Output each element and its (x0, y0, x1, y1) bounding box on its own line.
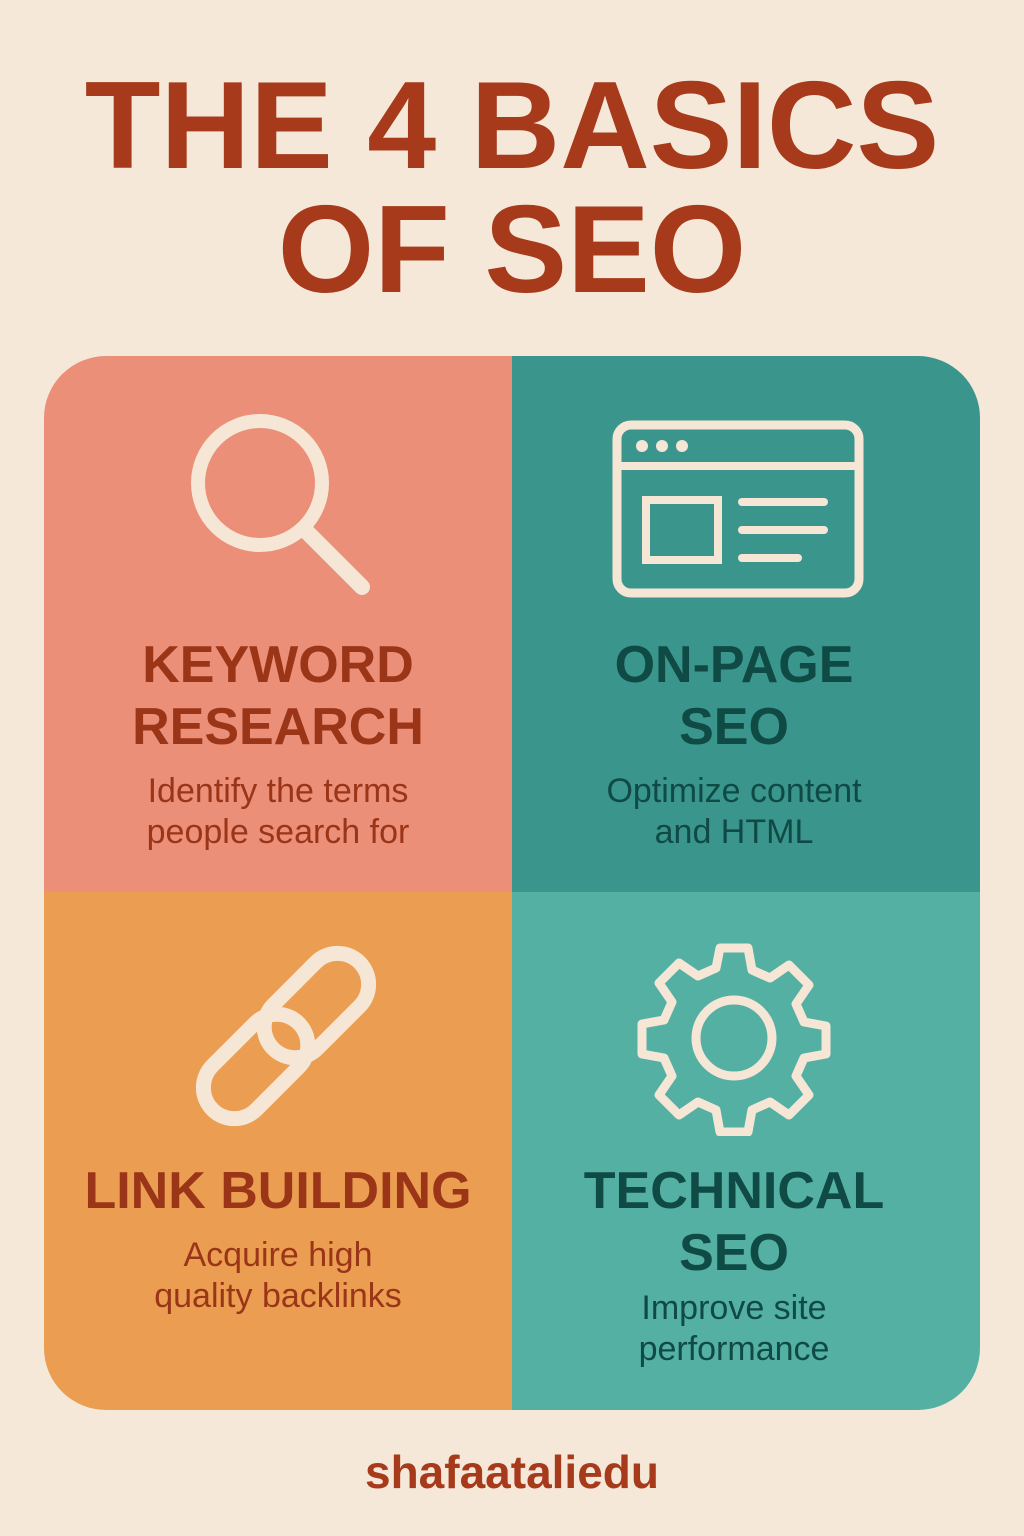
description: quality backlinks (154, 1277, 402, 1315)
heading (615, 636, 853, 756)
description: Identify the terms (148, 772, 408, 810)
description: people search for (147, 813, 409, 851)
panel: on-page seo (512, 356, 980, 892)
title: OF SEO (278, 181, 746, 319)
description (154, 1236, 402, 1315)
heading: ON-PAGE (615, 636, 853, 694)
heading: SEO (679, 1224, 789, 1282)
icon: gear (638, 944, 830, 1136)
panel grid (44, 356, 980, 1410)
description (606, 772, 862, 851)
footer brand: shafaataliedu (365, 1446, 659, 1498)
description: Improve site (641, 1289, 827, 1327)
description: Optimize content (606, 772, 862, 810)
icon: magnifier (191, 414, 370, 595)
title (85, 57, 939, 319)
icon: chain link (196, 946, 376, 1126)
description: and HTML (655, 813, 813, 851)
panel: technical seo (512, 892, 980, 1410)
heading: SEO (679, 698, 789, 756)
panel: keyword research (44, 356, 512, 892)
panel: link building (44, 892, 512, 1410)
icon: browser window (612, 420, 864, 598)
description: Acquire high (183, 1236, 372, 1274)
heading: LINK BUILDING (84, 1162, 472, 1220)
heading: RESEARCH (132, 698, 424, 756)
description: performance (639, 1330, 829, 1368)
heading (132, 636, 424, 756)
description (639, 1289, 829, 1368)
title: THE 4 BASICS (85, 57, 939, 195)
heading: KEYWORD (142, 636, 414, 694)
heading (584, 1162, 884, 1282)
heading: TECHNICAL (584, 1162, 884, 1220)
description (147, 772, 409, 851)
